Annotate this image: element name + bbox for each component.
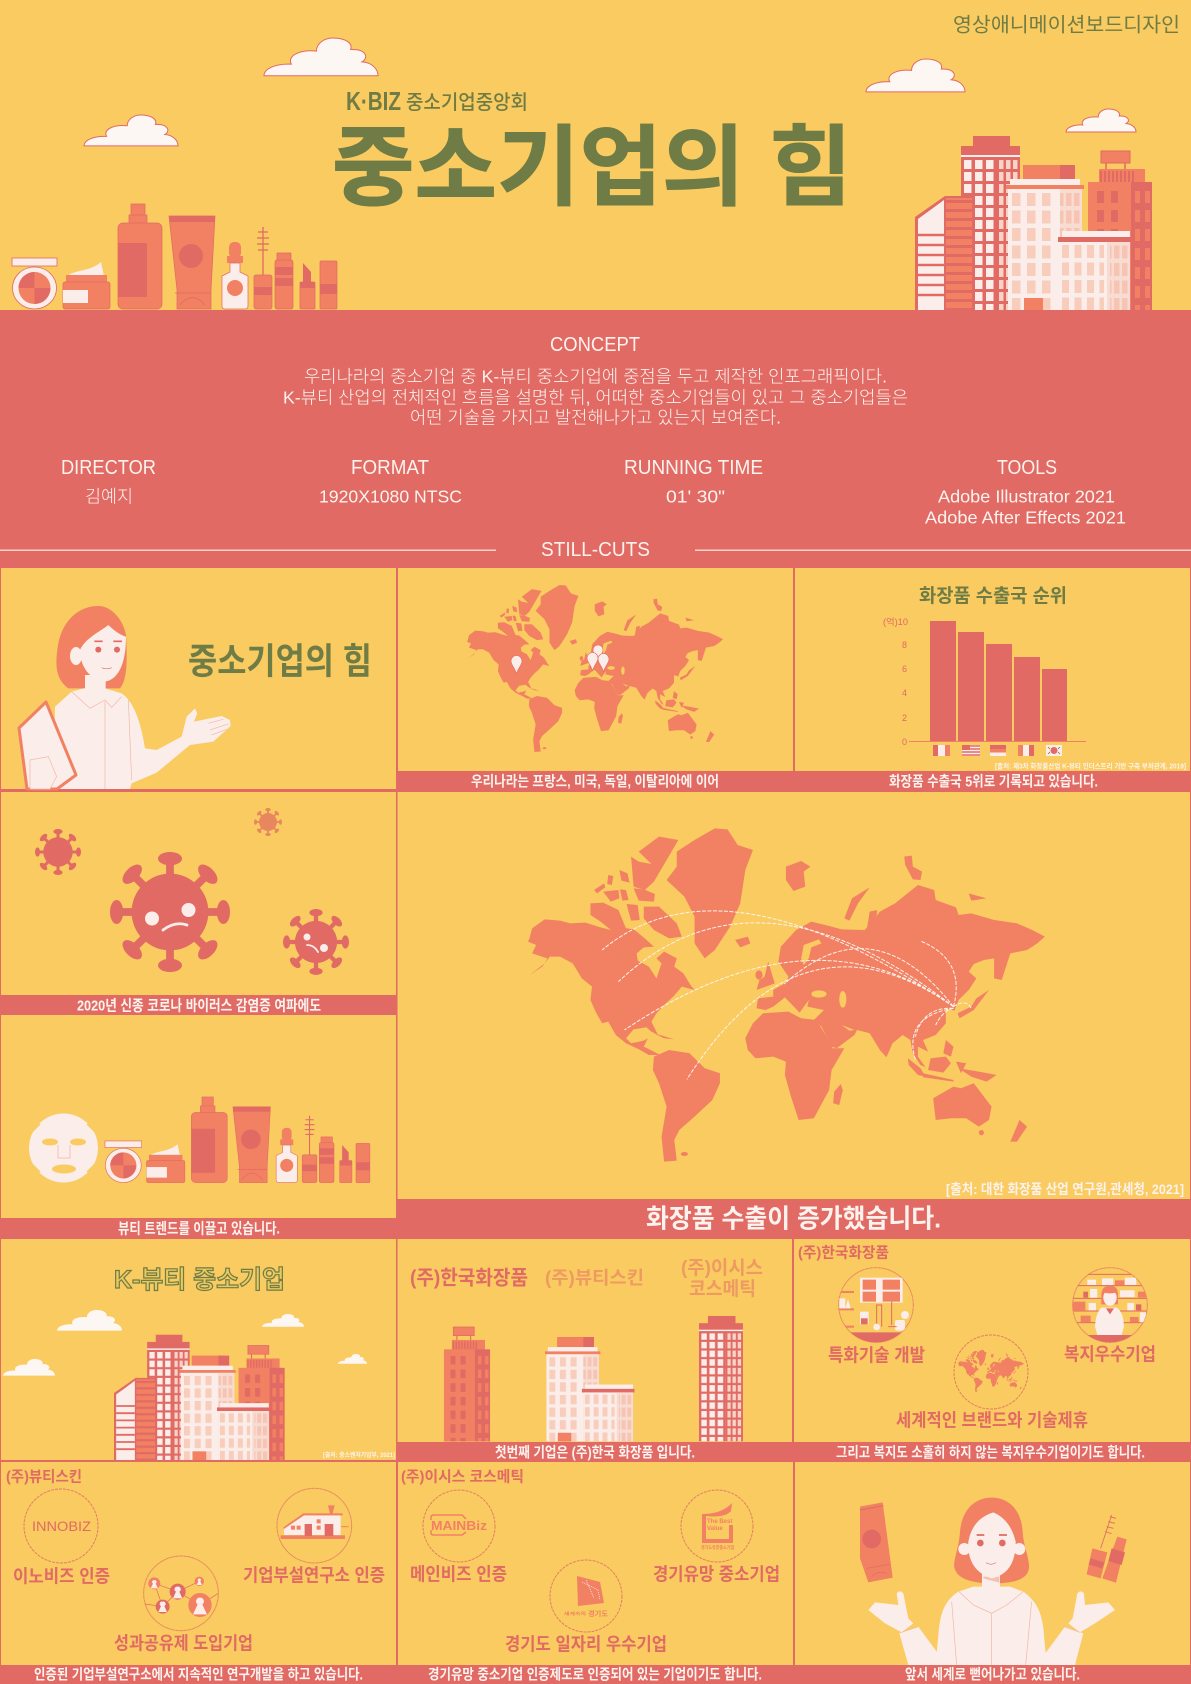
caption: welfare: 그리고 복지도 소홀히 하지 않는 복지우수기업이기도 합니다. bbox=[836, 1444, 1145, 1462]
y axis labels: 2 bbox=[902, 713, 907, 723]
company label: (주)뷰티스킨 bbox=[6, 1468, 82, 1486]
credit: tools: Adobe Illustrator 2021 bbox=[938, 486, 1115, 506]
export arcs bbox=[602, 911, 971, 1079]
header clouds bbox=[84, 38, 1136, 146]
source: [출처: 중소벤처기업부, 2021] bbox=[323, 1451, 395, 1459]
credit: director: 김예지 bbox=[85, 486, 133, 506]
slide title: K-뷰티 중소기업 bbox=[114, 1266, 285, 1294]
cosmetics row bbox=[105, 1097, 370, 1183]
icon: MAINBiz logo: MAINBiz bbox=[431, 1518, 488, 1533]
panel: beauty products bbox=[1, 1015, 396, 1218]
panel: presenter intro bbox=[1, 568, 396, 789]
feature labels bbox=[13, 1566, 385, 1654]
icon: mascara and lipstick bbox=[1087, 1515, 1127, 1583]
y axis labels: 8 bbox=[902, 640, 907, 650]
KBIZ logo bbox=[346, 86, 528, 116]
panel: K-beauty SMEs bbox=[1, 1239, 396, 1460]
icon: INNOBIZ logo bbox=[24, 1489, 98, 1563]
map pins bbox=[511, 645, 609, 674]
caption: 우리나라는 프랑스, 미국, 독일, 이탈리아에 이어 bbox=[471, 774, 719, 790]
icon: faint virus bbox=[254, 808, 282, 836]
company label: (주)한국화장품 bbox=[798, 1244, 889, 1262]
illustration: woman presenting products bbox=[868, 1498, 1115, 1665]
icon: people network bbox=[144, 1556, 218, 1631]
panel: world export map bbox=[398, 792, 1190, 1199]
feature labels: 세계적인 브랜드와 기술제휴 bbox=[896, 1410, 1088, 1430]
panel: world map with pins bbox=[398, 568, 793, 790]
icon: The Best Value logo: 경기도유망중소기업 bbox=[701, 1544, 734, 1551]
caption: R&D: 인증된 기업부설연구소에서 지속적인 연구개발을 하고 있습니다. bbox=[34, 1666, 363, 1684]
icon: tube bbox=[860, 1502, 893, 1582]
feature labels: 이노비즈 인증 bbox=[13, 1566, 110, 1586]
company names bbox=[410, 1257, 763, 1300]
header label: department: 영상애니메이션보드디자인 bbox=[953, 14, 1180, 36]
caption: beauty trend: 뷰티 트렌드를 이끌고 있습니다. bbox=[118, 1220, 280, 1238]
icon: laboratory bbox=[837, 1268, 915, 1345]
credit: running time bbox=[624, 457, 763, 506]
credit: format: 1920X1080 NTSC bbox=[319, 486, 462, 506]
icon: The Best Value logo bbox=[681, 1490, 753, 1562]
small world map bbox=[467, 585, 723, 752]
icon: INNOBIZ logo: INNOBIZ bbox=[32, 1519, 91, 1534]
title: 중소기업의 힘 bbox=[332, 118, 852, 217]
y axis labels: 6 bbox=[902, 664, 907, 674]
caption: certification: 경기유망 중소기업 인증제도로 인증되어 있는 기업이기도 합니다. bbox=[428, 1666, 762, 1684]
company names: (주)한국화장품 bbox=[410, 1266, 528, 1290]
building: Hankook bbox=[444, 1327, 490, 1441]
icon: Gyeonggi-do logo bbox=[550, 1560, 622, 1632]
KBIZ logo: 중소기업중앙회 bbox=[406, 91, 528, 114]
panel: Isis Cosmetic details bbox=[398, 1462, 793, 1665]
icon: pharmacist on shelves bbox=[1072, 1268, 1148, 1343]
feature labels: 특화기술 개발 bbox=[828, 1346, 925, 1366]
icon: small virus bbox=[35, 829, 81, 875]
icon: sheet mask bbox=[29, 1114, 98, 1182]
credit: tools: TOOLS bbox=[997, 457, 1057, 479]
credit: running time: RUNNING TIME bbox=[624, 457, 763, 479]
bars bbox=[930, 621, 1067, 741]
panel: Hankook details bbox=[794, 1239, 1190, 1442]
y axis labels: 4 bbox=[902, 688, 907, 698]
flags bbox=[933, 745, 1062, 756]
icon: Gyeonggi-do logo: 경기도 bbox=[588, 1609, 609, 1618]
credit: format: FORMAT bbox=[351, 457, 429, 479]
company names: (주)이시스 bbox=[681, 1257, 763, 1279]
building: Isis bbox=[699, 1316, 743, 1441]
clouds bbox=[3, 1310, 367, 1376]
slide title: 중소기업의 힘 bbox=[188, 640, 372, 682]
caption: 화장품 수출국 5위로 기록되고 있습니다. bbox=[889, 774, 1098, 790]
header cosmetics illustration bbox=[12, 204, 337, 309]
icon: The Best Value logo: Value bbox=[707, 1526, 723, 1532]
caption: first company: 첫번째 기업은 (주)한국 화장품 입니다. bbox=[495, 1444, 695, 1462]
credit: format bbox=[319, 457, 462, 506]
feature labels: 경기유망 중소기업 bbox=[653, 1564, 780, 1584]
panel: woman with cosmetics bbox=[795, 1462, 1190, 1665]
panel: coronavirus bbox=[1, 792, 396, 995]
caption: coronavirus: 2020년 신종 코로나 바이러스 감염증 여파에도 bbox=[77, 998, 321, 1014]
still-cuts heading: STILL-CUTS bbox=[541, 539, 650, 561]
KBIZ logo: K·BIZ bbox=[346, 86, 401, 116]
icon: The Best Value logo: The Best bbox=[707, 1519, 732, 1525]
icon: MAINBiz logo bbox=[423, 1490, 495, 1562]
concept heading: CONCEPT bbox=[550, 334, 640, 356]
concept body: 어떤 기술을 가지고 발전해나가고 있는지 보여준다. bbox=[410, 408, 781, 428]
panel: export ranking chart bbox=[795, 568, 1190, 790]
building: Beautyskin bbox=[545, 1337, 634, 1441]
company names: (주)뷰티스킨 bbox=[545, 1268, 644, 1288]
y axis labels: (억)10 bbox=[883, 616, 908, 627]
feature labels: 복지우수기업 bbox=[1064, 1344, 1156, 1364]
icon: medium sad virus bbox=[283, 909, 349, 975]
company names: 코스메틱 bbox=[689, 1278, 756, 1300]
company label: (주)이시스 코스메틱 bbox=[401, 1468, 524, 1486]
feature labels bbox=[410, 1564, 780, 1654]
feature labels bbox=[828, 1344, 1156, 1430]
y axis labels bbox=[883, 616, 908, 747]
panel: Beautyskin details bbox=[1, 1462, 396, 1665]
credit: director bbox=[61, 457, 156, 506]
caption: expansion: 앞서 세계로 뻗어나가고 있습니다. bbox=[905, 1666, 1080, 1684]
credit: running time: 01' 30" bbox=[666, 486, 725, 506]
concept body: K-뷰티 산업의 전체적인 흐름을 설명한 뒤, 어떠한 중소기업들이 있고 그 중소기업들은 bbox=[283, 388, 908, 408]
chart title: 화장품 수출국 순위 bbox=[919, 585, 1067, 607]
feature labels: 기업부설연구소 인증 bbox=[243, 1566, 385, 1586]
large world map with export arcs bbox=[528, 828, 1045, 1162]
header city illustration bbox=[915, 136, 1152, 310]
caption: exports increased: 화장품 수출이 증가했습니다. bbox=[646, 1204, 941, 1234]
city illustration bbox=[114, 1335, 285, 1460]
feature labels: 성과공유제 도입기업 bbox=[114, 1634, 253, 1654]
icon: large sad virus bbox=[110, 852, 230, 972]
credit: director: DIRECTOR bbox=[61, 457, 156, 479]
panel: three companies bbox=[398, 1239, 792, 1442]
icon: Gyeonggi-do logo: 세계속의 bbox=[564, 1610, 586, 1616]
illustration: woman presenting bbox=[19, 606, 231, 789]
feature labels: 경기도 일자리 우수기업 bbox=[505, 1634, 667, 1654]
feature labels: 메인비즈 인증 bbox=[410, 1564, 507, 1584]
concept body bbox=[283, 366, 908, 428]
credit: tools bbox=[925, 457, 1126, 528]
concept body: 우리나라의 중소기업 중 K-뷰티 중소기업에 중점을 두고 제작한 인포그래픽이다. bbox=[304, 366, 887, 386]
y axis labels: 0 bbox=[902, 737, 907, 747]
credit: tools: Adobe After Effects 2021 bbox=[925, 508, 1126, 528]
icon: research institute house bbox=[277, 1488, 352, 1563]
icon: world circle bbox=[954, 1335, 1028, 1409]
